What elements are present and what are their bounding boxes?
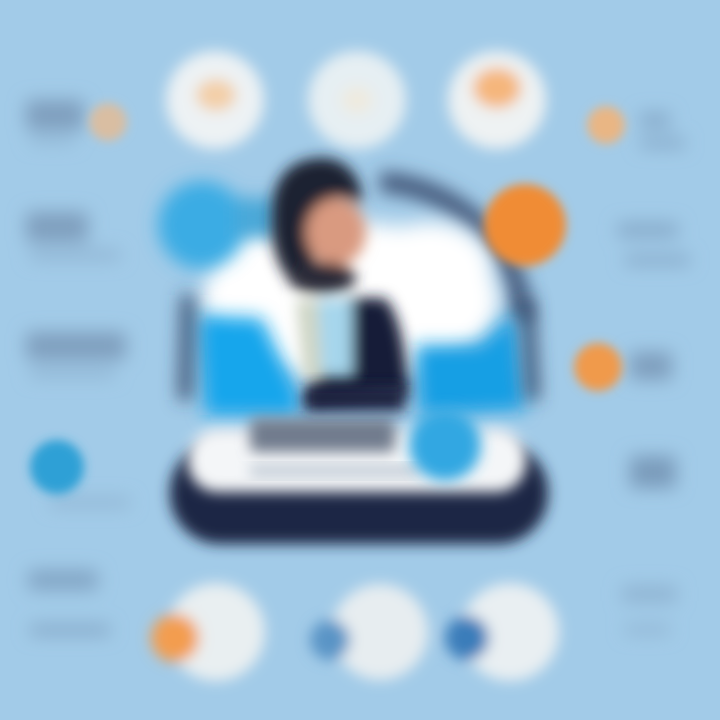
text block: right 2 — [618, 223, 690, 265]
icon: top left circle — [166, 51, 264, 149]
icon: orange dot right — [574, 343, 622, 391]
person — [272, 158, 408, 405]
icon: pale orange dot right — [587, 106, 625, 144]
icon: blue circle on laptop — [409, 409, 481, 481]
text block: right 3 — [630, 352, 672, 380]
text block: left 5 — [28, 570, 110, 635]
icon: blue circle top left — [158, 181, 277, 269]
face — [306, 198, 366, 266]
icon: orange circle top right — [484, 184, 566, 266]
white cloud backdrop — [202, 222, 498, 378]
text block: left 1 — [26, 100, 84, 144]
right side labels — [618, 113, 690, 634]
laptop dark base — [170, 442, 548, 544]
trackpad stripe — [250, 466, 420, 476]
icon: bottom middle circle — [310, 584, 428, 680]
shirt and tie — [318, 300, 352, 375]
text block: left 2 — [26, 212, 120, 260]
text block: left 3 — [26, 332, 126, 378]
icon: top middle circle — [308, 51, 406, 149]
icon: bottom right circle — [445, 583, 559, 681]
text block: right 1 — [640, 113, 685, 148]
left side labels — [26, 100, 130, 635]
orange and blue side dots — [30, 103, 625, 494]
dark arc sides — [185, 295, 533, 400]
blue side panels — [198, 312, 525, 415]
top icon circles — [166, 51, 546, 149]
left blue panel — [198, 315, 300, 415]
text block: right 4 — [630, 456, 676, 488]
right blue panel — [415, 312, 525, 415]
dark arc behind person — [380, 182, 522, 320]
hair and beard — [272, 158, 361, 290]
dark hands — [305, 385, 405, 411]
text block: left 4 — [50, 498, 130, 507]
torso — [305, 298, 408, 405]
icon: blue dot left — [30, 440, 84, 494]
text block: right 5 — [622, 586, 677, 634]
beard lower — [288, 262, 356, 294]
bottom icon circles — [151, 583, 559, 681]
laptop — [170, 385, 548, 544]
icon: pale orange dot left — [89, 103, 127, 141]
keyboard — [250, 418, 395, 452]
icon: top right circle — [448, 51, 546, 149]
laptop white deck — [188, 428, 526, 492]
icon: bottom left circle — [151, 583, 265, 681]
left collar — [296, 300, 322, 380]
